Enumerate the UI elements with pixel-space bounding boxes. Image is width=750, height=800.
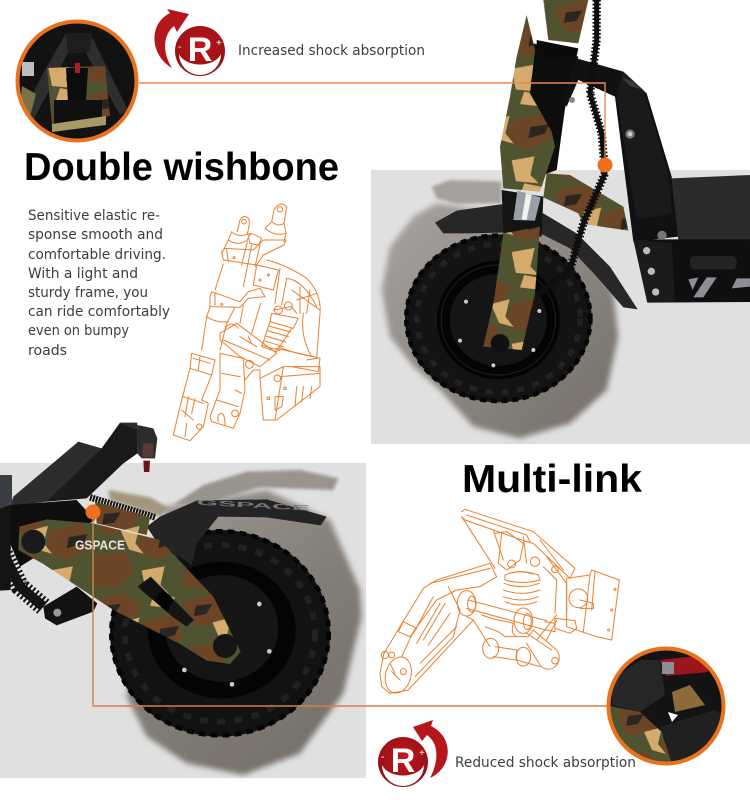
diagram: multi-link line drawing <box>380 509 619 696</box>
R badge: R <box>188 31 212 69</box>
rear fender <box>147 499 327 565</box>
text block: description: With a light and <box>28 266 138 282</box>
deck end <box>0 475 12 508</box>
connector line: top callout <box>139 83 605 165</box>
panel: front wheel photo <box>371 0 750 444</box>
bracket bolt <box>53 609 61 617</box>
text block: description: comfortable driving. <box>28 247 166 263</box>
red curved arrow down <box>413 720 448 778</box>
R badge: + <box>216 38 222 49</box>
caption: reduced shock absorption: Reduced shock absorption <box>455 755 636 771</box>
caption: increased shock absorption: Increased shock absorption <box>238 43 425 59</box>
R badge <box>378 737 428 787</box>
R badge <box>175 26 225 76</box>
front rim and hub <box>437 261 560 379</box>
battery box <box>633 231 750 303</box>
heading: double wishbone: Double wishbone <box>24 146 339 189</box>
rear tyre <box>110 530 330 737</box>
fork leg upper <box>500 15 555 192</box>
marker dot: front suspension <box>598 158 612 172</box>
text block: description: sturdy frame, you <box>28 285 148 301</box>
diagram: double wishbone line drawing <box>173 204 320 441</box>
deck side <box>0 505 11 591</box>
tail light <box>137 425 157 472</box>
fork leg lower <box>483 227 540 350</box>
rear upper body <box>10 423 137 567</box>
upper camouflage link <box>95 502 150 535</box>
R badge: - <box>178 42 181 53</box>
deck <box>672 175 750 240</box>
icon: reduced shock absorption <box>378 720 448 787</box>
heading: multi-link: Multi-link <box>462 458 643 501</box>
axle bolt <box>213 634 237 658</box>
lower bracket <box>43 587 97 625</box>
red curved arrow up <box>154 9 189 68</box>
text block: description: can ride comfortably <box>28 304 170 320</box>
inset: front suspension close-up <box>17 20 137 142</box>
text block: description: even on bumpy <box>28 323 129 339</box>
chain <box>90 497 155 517</box>
text block: description: sponse smooth and <box>28 227 163 243</box>
rear wheel motion blur <box>108 470 362 775</box>
axle bolt <box>491 334 509 353</box>
fender logo: GSPACE <box>197 498 311 513</box>
text block: description: roads <box>28 343 67 359</box>
swing arm logo: GSPACE <box>75 538 125 552</box>
R badge: - <box>381 752 384 763</box>
steering collar <box>537 40 578 63</box>
R badge: + <box>419 748 425 759</box>
front tyre <box>405 234 592 402</box>
steering column and frame <box>527 43 678 242</box>
fork clamp and silver tube <box>502 190 543 237</box>
steering tube <box>543 0 588 43</box>
inset: rear suspension close-up <box>608 648 725 764</box>
front wheel motion blur <box>382 180 618 438</box>
R badge: R <box>391 742 415 780</box>
marker dot: rear suspension <box>86 504 100 520</box>
icon: increased shock absorption <box>154 9 225 76</box>
text block: description: Sensitive elastic re- <box>28 208 160 224</box>
camouflage swing arm <box>543 173 628 231</box>
connector line: bottom callout <box>93 512 610 706</box>
brake cable <box>537 0 605 295</box>
front fender <box>435 204 638 309</box>
pivot bolt <box>21 530 45 554</box>
rear rim and hub <box>148 562 296 698</box>
spring <box>0 547 43 607</box>
text block: description <box>28 208 170 359</box>
camouflage swing arm <box>18 519 241 664</box>
panel: rear wheel photo <box>0 423 366 778</box>
